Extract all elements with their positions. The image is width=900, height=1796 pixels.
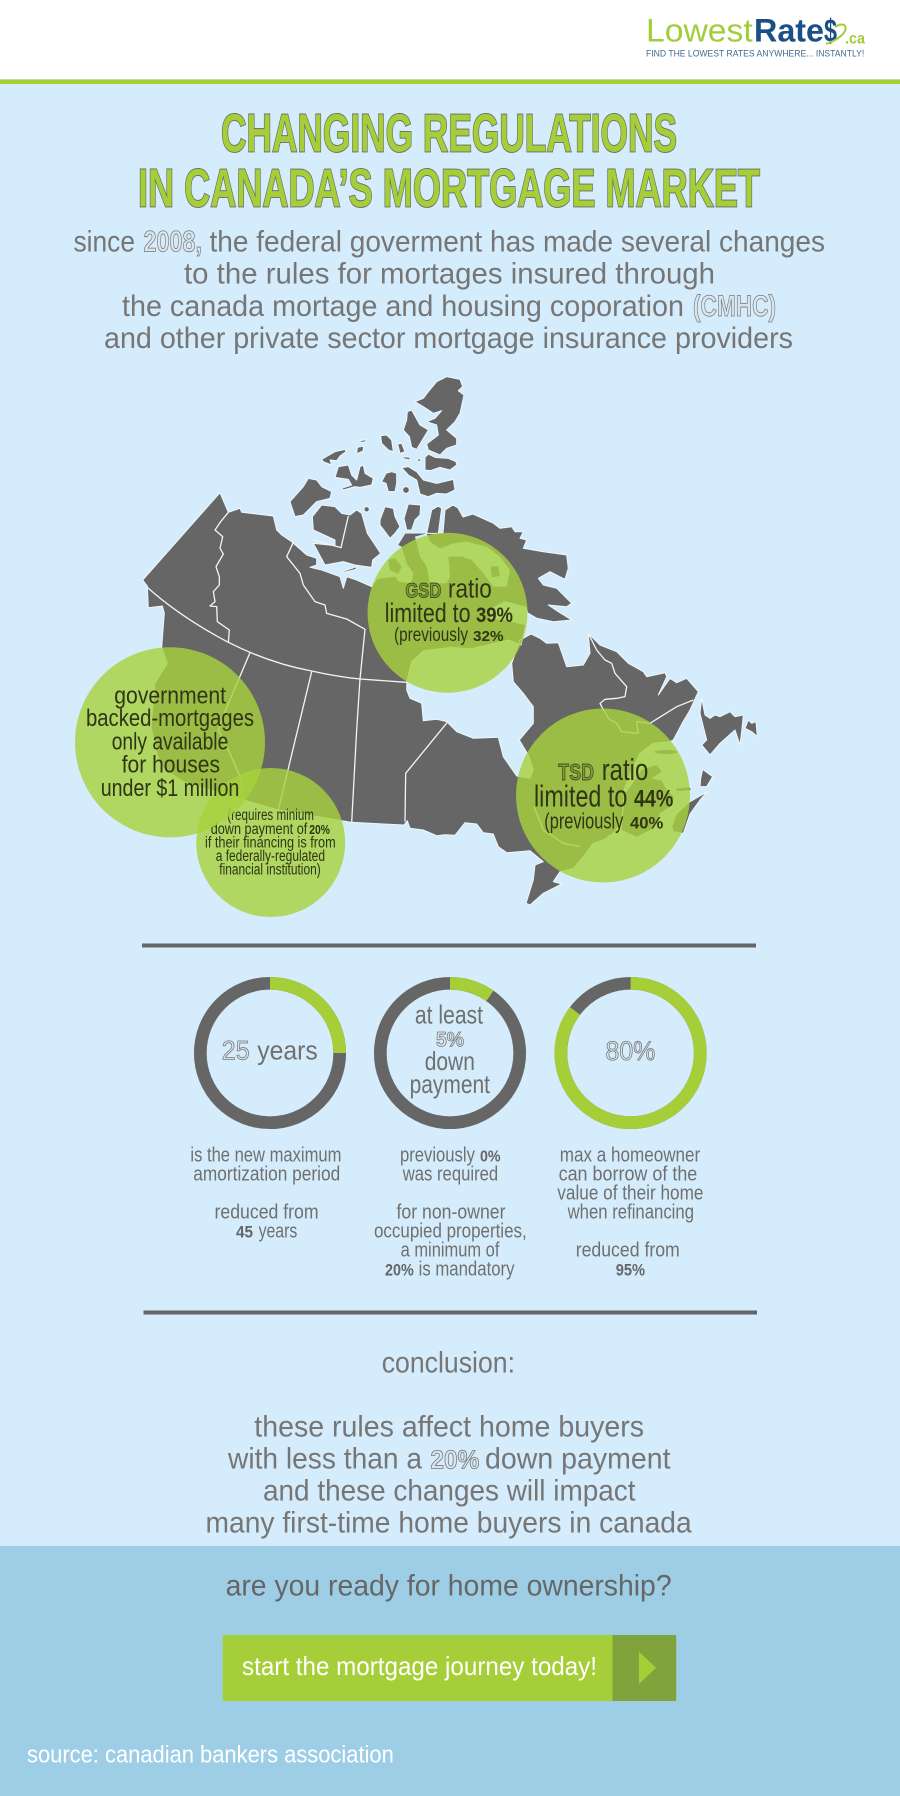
icon: arrow — [639, 1652, 656, 1684]
caption: amortization period — [193, 1164, 340, 1186]
map of Canada — [143, 377, 757, 905]
conclusion text — [206, 1411, 692, 1539]
callout: TSD ratio: limited to — [534, 779, 627, 814]
callout: government-backed mortgages: only available — [112, 728, 228, 755]
callout: GSD ratio: ratio — [448, 574, 492, 604]
intro text block: the federal goverment has made several changes — [210, 226, 825, 259]
callout: TSD ratio: ratio — [602, 752, 648, 787]
footer panel — [0, 1546, 900, 1796]
caption: 45 — [236, 1223, 253, 1242]
map: Newfoundland and Maritimes — [622, 698, 757, 837]
caption: 95% — [616, 1261, 645, 1280]
logo: LowestRates.ca: FIND THE LOWEST RATES ANYWHERE... INSTANTLY! — [646, 49, 864, 60]
caption: is the new maximum — [190, 1145, 341, 1167]
callout: government-backed mortgages: for houses — [122, 752, 220, 779]
intro text block: since — [74, 226, 135, 259]
intro text block: 2008, — [144, 226, 202, 259]
caption: previously — [400, 1145, 475, 1167]
logo: LowestRates.ca: Rate — [754, 13, 824, 49]
stat: 80 percent — [557, 983, 704, 1280]
callout: GSD ratio: GSD — [405, 580, 441, 602]
callout: government-backed mortgages: under $1 million — [101, 775, 239, 802]
donut chart: 25 percent — [200, 983, 340, 1123]
intro text block: (CMHC) — [693, 290, 776, 323]
conclusion heading: conclusion: — [382, 1347, 515, 1380]
conclusion text: 20% — [430, 1445, 479, 1475]
donut chart: 85 percent — [561, 983, 700, 1123]
map: mainland and Baffin — [143, 493, 698, 905]
callout: government-backed mortgages: backed-mortgages — [86, 705, 254, 732]
map: provincial borders — [147, 512, 693, 847]
callout: GSD ratio: (previously — [394, 625, 468, 646]
donut label: payment — [410, 1069, 491, 1099]
callout: minimum down payment: 20% — [309, 822, 330, 837]
logo: LowestRates.ca: Lowest — [646, 13, 753, 49]
caption: max a homeowner — [560, 1145, 700, 1167]
title: CHANGING REGULATIONS — [221, 104, 677, 164]
caption — [557, 1145, 704, 1280]
callout: minimum down payment: down payment of — [211, 821, 308, 838]
caption: can borrow of the — [559, 1164, 697, 1186]
caption — [190, 1145, 341, 1243]
donut label: 25 — [222, 1035, 250, 1065]
caption: years — [259, 1221, 297, 1243]
caption: was required — [402, 1164, 498, 1186]
callout: GSD ratio: 39% — [476, 604, 513, 627]
conclusion text: down payment — [485, 1443, 671, 1476]
caption: 20% — [385, 1261, 414, 1280]
logo: LowestRates.ca: $ — [824, 13, 837, 49]
caption: value of their home — [557, 1182, 704, 1204]
callout: TSD ratio — [516, 708, 690, 882]
caption — [374, 1145, 527, 1281]
caption: reduced from — [214, 1202, 319, 1224]
caption: when refinancing — [567, 1202, 694, 1224]
logo: LowestRates.ca — [646, 13, 865, 60]
call to action button: start the mortgage journey today! — [242, 1651, 597, 1681]
callout: TSD ratio: (previously — [544, 808, 623, 833]
caption: reduced from — [576, 1240, 680, 1262]
map: Hudson Bay inlets under circle — [367, 533, 532, 627]
logo: LowestRates.ca: .ca — [845, 30, 865, 48]
intro text block: the canada mortage and housing coporation — [122, 290, 684, 323]
stat: 25 years — [190, 983, 341, 1243]
caption: for non-owner — [396, 1202, 506, 1224]
caption: is mandatory — [419, 1259, 514, 1281]
intro text block: to the rules for mortages insured through — [184, 258, 715, 290]
title — [138, 104, 760, 218]
donut label — [410, 999, 491, 1099]
donut label: years — [257, 1035, 318, 1065]
callout: minimum down payment: financial institution) — [219, 861, 321, 878]
donut label — [222, 1035, 318, 1065]
conclusion text: with less than a — [227, 1443, 422, 1476]
callout: minimum down payment: (requires minium — [227, 807, 314, 824]
donut chart: 10 percent — [380, 983, 520, 1123]
donut label: 80% — [606, 1036, 655, 1066]
map: arctic islands — [290, 377, 464, 573]
footer question: are you ready for home ownership? — [226, 1570, 672, 1603]
conclusion text: these rules affect home buyers — [254, 1411, 644, 1444]
caption: a minimum of — [401, 1240, 500, 1262]
conclusion text: many first-time home buyers in canada — [206, 1506, 692, 1539]
callout: minimum down payment — [196, 768, 345, 917]
callout: minimum down payment: a federally-regulated — [216, 848, 325, 865]
callout: TSD ratio: 44% — [634, 786, 673, 813]
header band — [0, 0, 900, 84]
callout: government-backed mortgages — [75, 647, 265, 837]
call to action button — [223, 1635, 676, 1701]
caption: 0% — [480, 1149, 501, 1166]
callout: TSD ratio: 40% — [630, 813, 663, 832]
donut label: down — [425, 1046, 475, 1076]
intro text block — [74, 226, 825, 355]
callout: GSD ratio: 32% — [473, 628, 504, 645]
source: source: canadian bankers association — [27, 1741, 394, 1768]
stat: at least 5% down payment — [374, 983, 527, 1281]
callout: government-backed mortgages: government — [114, 682, 226, 709]
intro text block: and other private sector mortgage insurance providers — [104, 322, 793, 355]
caption: occupied properties, — [374, 1221, 527, 1243]
callout: minimum down payment: if their financing is from — [205, 834, 336, 851]
donut label: 5% — [436, 1029, 464, 1052]
callout: GSD ratio: limited to — [385, 598, 471, 628]
conclusion text: and these changes will impact — [263, 1475, 636, 1508]
callout: GSD ratio — [368, 533, 528, 693]
donut label: at least — [415, 999, 484, 1029]
callout: TSD ratio: TSD — [558, 759, 594, 785]
